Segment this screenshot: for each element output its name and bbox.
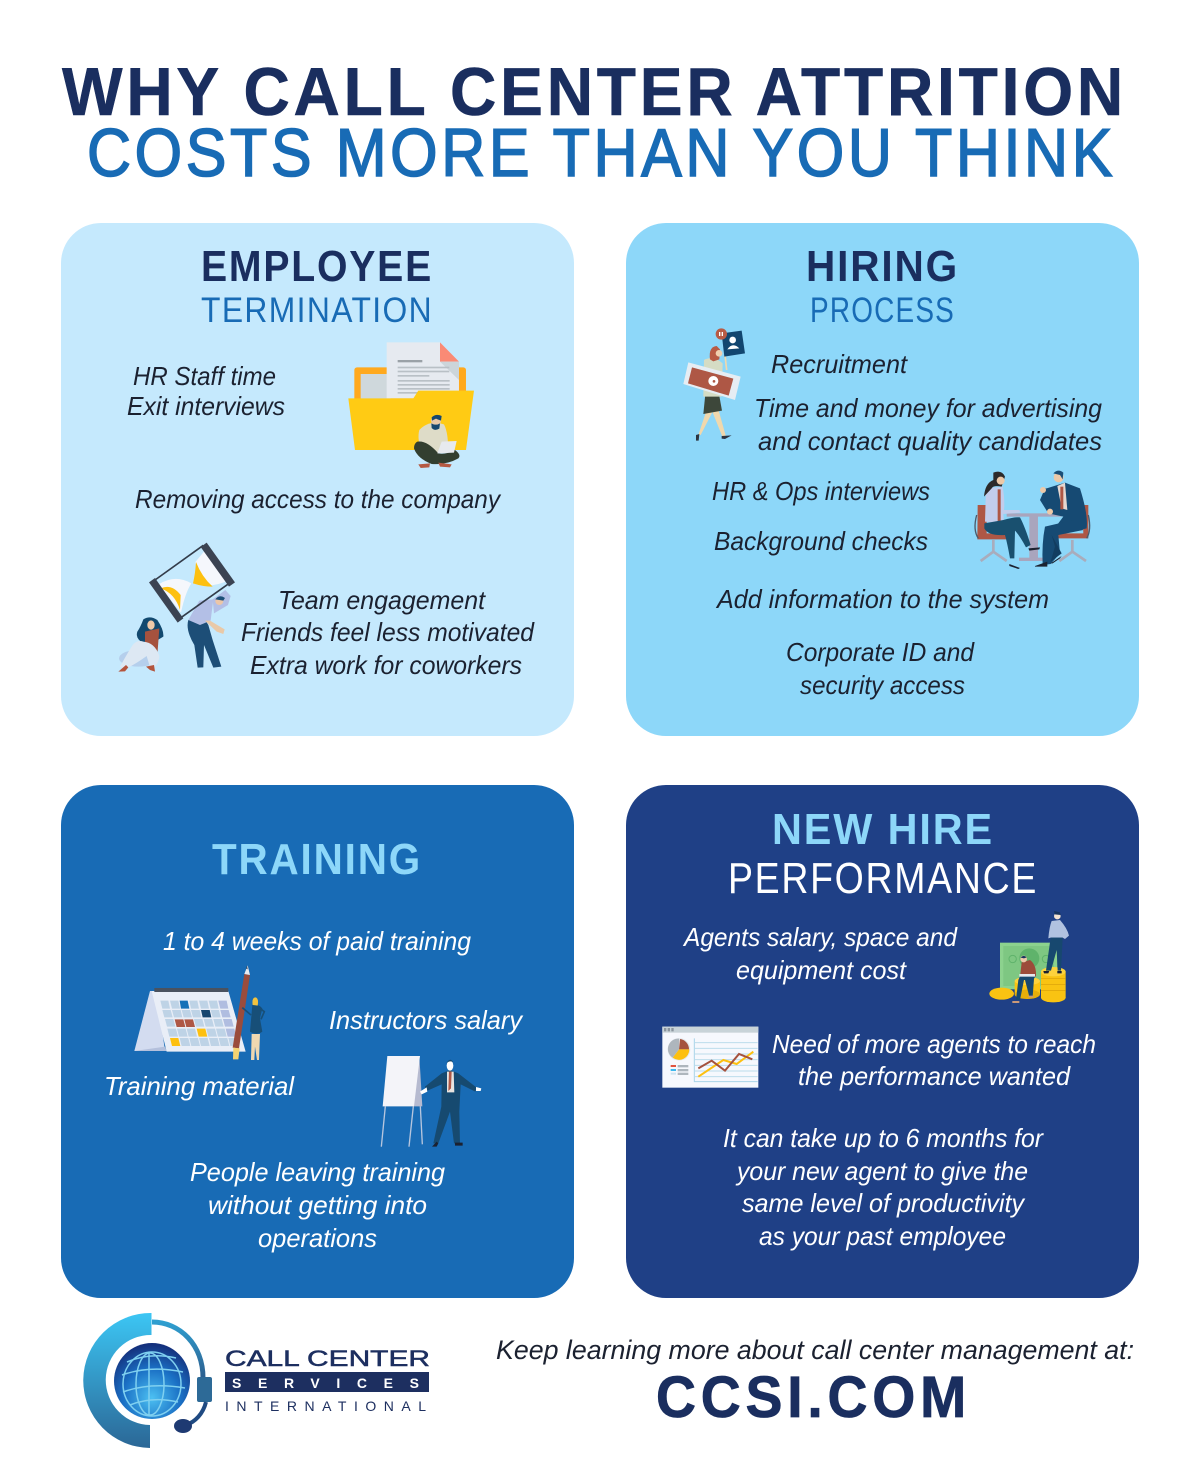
icon: analytics report [662, 1027, 758, 1088]
heading: hiring process [806, 242, 959, 330]
title: COSTS MORE THAN YOU THINK [87, 115, 1116, 191]
text: productivity: It can take up to 6 months for [723, 1123, 1044, 1153]
panel: employee termination [61, 223, 574, 736]
text: interviews and background checks: HR & Ops interviews [712, 476, 930, 506]
text: need more agents: the performance wanted [798, 1061, 1071, 1091]
footer call to action: Keep learning more about call center management at: [496, 1335, 1134, 1365]
text: need more agents [772, 1029, 1096, 1091]
text: instructors salary: Instructors salary [329, 1005, 524, 1035]
text: agents salary: equipment cost [736, 955, 908, 985]
text: training material: Training material [104, 1071, 295, 1101]
text: productivity: as your past employee [759, 1221, 1006, 1251]
text: productivity: same level of productivity [742, 1188, 1026, 1218]
text: add information: Add information to the system [715, 584, 1049, 614]
text: productivity: your new agent to give the [735, 1156, 1028, 1186]
heading: new hire performance [728, 805, 1038, 903]
icon: hourglass carried by man, seated woman [118, 543, 235, 672]
text: HR staff time and exit interviews [127, 361, 285, 421]
text: HR staff time and exit interviews: HR Staff time [133, 361, 276, 391]
panel: new hire performance [626, 785, 1139, 1298]
panel: hiring process [626, 223, 1139, 736]
text: team engagement: Friends feel less motivated [241, 617, 535, 647]
text: recruitment [754, 349, 1103, 456]
text: paid training: 1 to 4 weeks of paid training [163, 926, 472, 956]
text: corporate ID [786, 637, 975, 700]
heading: employee termination [201, 242, 433, 330]
logo: call center services international: CALL CENTER [225, 1346, 430, 1371]
text: people leaving training: without getting into [208, 1190, 427, 1220]
text: people leaving training: People leaving training [190, 1157, 446, 1187]
text: people leaving training [190, 1157, 446, 1253]
heading: training: TRAINING [212, 835, 422, 884]
heading: employee termination: EMPLOYEE [201, 242, 433, 291]
footer call to action [496, 1335, 1134, 1430]
text: need more agents: Need of more agents to reach [772, 1029, 1096, 1059]
logo: call center services international: SERVICES [232, 1375, 419, 1391]
text: agents salary: Agents salary, space and [682, 922, 958, 952]
text: interviews and background checks: Background checks [714, 526, 928, 556]
heading: hiring process: HIRING [806, 242, 959, 291]
text: agents salary [682, 922, 958, 985]
text: team engagement [241, 585, 535, 680]
text: corporate ID: Corporate ID and [786, 637, 975, 667]
text: people leaving training: operations [258, 1223, 377, 1253]
logo: call center services international [83, 1313, 430, 1448]
icon: folder with seated man [348, 342, 474, 468]
icon: woman carrying phone [683, 328, 745, 441]
icon: calendar with pencil and woman [134, 965, 264, 1060]
heading: new hire performance: NEW HIRE [772, 805, 994, 854]
text: team engagement: Team engagement [278, 585, 487, 615]
text: productivity [723, 1123, 1044, 1251]
text: HR staff time and exit interviews: Exit interviews [127, 391, 285, 421]
text: recruitment: Time and money for advertising [754, 393, 1103, 423]
logo: call center services international: INTERNATIONAL [225, 1398, 426, 1414]
icon: instructor at flip chart [381, 1056, 481, 1147]
text: removing access: Removing access to the company [135, 484, 502, 514]
text: recruitment: and contact quality candidates [758, 426, 1102, 456]
icon: interview at table [975, 471, 1090, 569]
title [62, 54, 1127, 191]
text: recruitment: Recruitment [771, 349, 909, 379]
title: WHY CALL CENTER ATTRITION [62, 54, 1127, 130]
text: team engagement: Extra work for coworkers [250, 650, 522, 680]
panel: training [61, 785, 574, 1298]
text: interviews and background checks [712, 476, 930, 556]
text: corporate ID: security access [800, 670, 965, 700]
heading: employee termination: TERMINATION [201, 291, 433, 330]
icon: money and coins with two men [989, 911, 1069, 1003]
heading: hiring process: PROCESS [810, 291, 955, 330]
heading: new hire performance: PERFORMANCE [728, 854, 1038, 903]
footer call to action: CCSI.COM [656, 1365, 971, 1430]
